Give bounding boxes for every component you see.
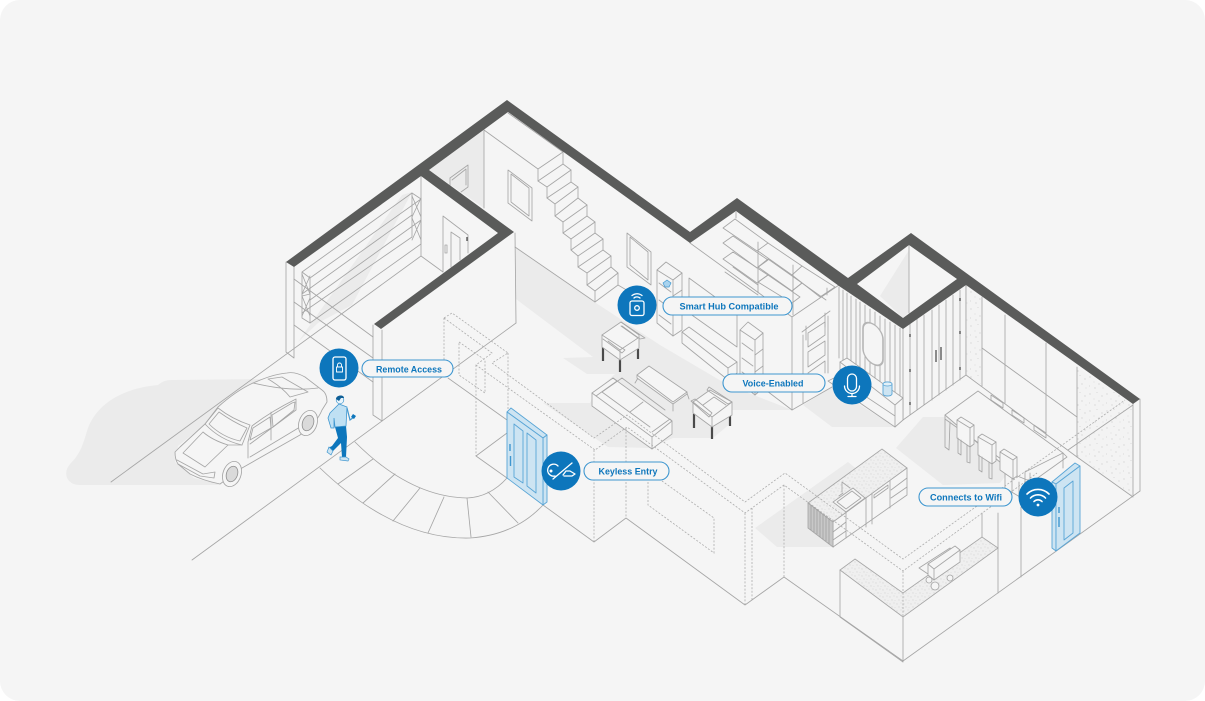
label pill: Keyless Entry — [598, 466, 658, 478]
label pill: Connects to Wifi — [930, 492, 1002, 504]
icon: microphone — [832, 366, 872, 404]
label pill — [663, 297, 792, 315]
bookcase left — [657, 262, 682, 336]
callout: Smart Hub Compatible — [618, 286, 792, 324]
label pill: Voice-Enabled — [742, 378, 804, 390]
voice assistant device on console — [883, 382, 892, 396]
front wheel — [219, 459, 245, 489]
armchair right — [691, 387, 732, 439]
rear wheel — [295, 408, 321, 438]
living room back wall, shelving and bench — [657, 212, 839, 410]
callout: Voice-Enabled — [723, 366, 872, 404]
label pill: Smart Hub Compatible — [680, 302, 778, 312]
dashed hidden walls — [444, 313, 1125, 617]
icon: key crossed out — [542, 452, 580, 490]
low bench — [682, 327, 737, 380]
callout: Keyless Entry — [542, 452, 669, 490]
kitchen island — [808, 449, 907, 547]
callout: Remote Access — [320, 348, 453, 388]
garage room lines — [286, 176, 516, 421]
icon: smart hub — [618, 286, 656, 324]
sofa — [592, 378, 672, 449]
kitchen counter with cooktop — [840, 507, 1021, 662]
icon: smartphone with lock — [320, 348, 358, 388]
dark wall tops — [286, 100, 1140, 404]
striped feature wall with mirror and console — [828, 287, 903, 427]
coffee table — [635, 366, 689, 411]
person walking with phone — [327, 395, 356, 461]
label pill — [723, 374, 825, 392]
bookcase right — [740, 322, 763, 395]
closet doors — [903, 245, 966, 420]
car — [175, 373, 327, 489]
dining table and chairs — [945, 391, 1067, 500]
hallway wall with stairs and frames — [450, 113, 651, 302]
armchair left — [602, 322, 645, 372]
callout: Connects to Wifi — [919, 478, 1058, 516]
driveway and pavement lines — [111, 256, 543, 560]
label pill: Remote Access — [376, 364, 442, 376]
floor and ground shadows — [66, 130, 1010, 547]
icon: wifi — [1018, 478, 1058, 516]
blue door: kitchen — [1052, 463, 1080, 551]
wall shelves — [723, 219, 835, 315]
blue door: keyless entry — [507, 408, 547, 505]
door handle: inner door — [466, 237, 468, 241]
smart hub device on shelf — [663, 280, 671, 287]
kitchen back wall and stone panels — [966, 285, 1140, 497]
stairs — [538, 152, 618, 302]
partition door — [792, 311, 832, 410]
outer floor outline — [448, 378, 1140, 661]
